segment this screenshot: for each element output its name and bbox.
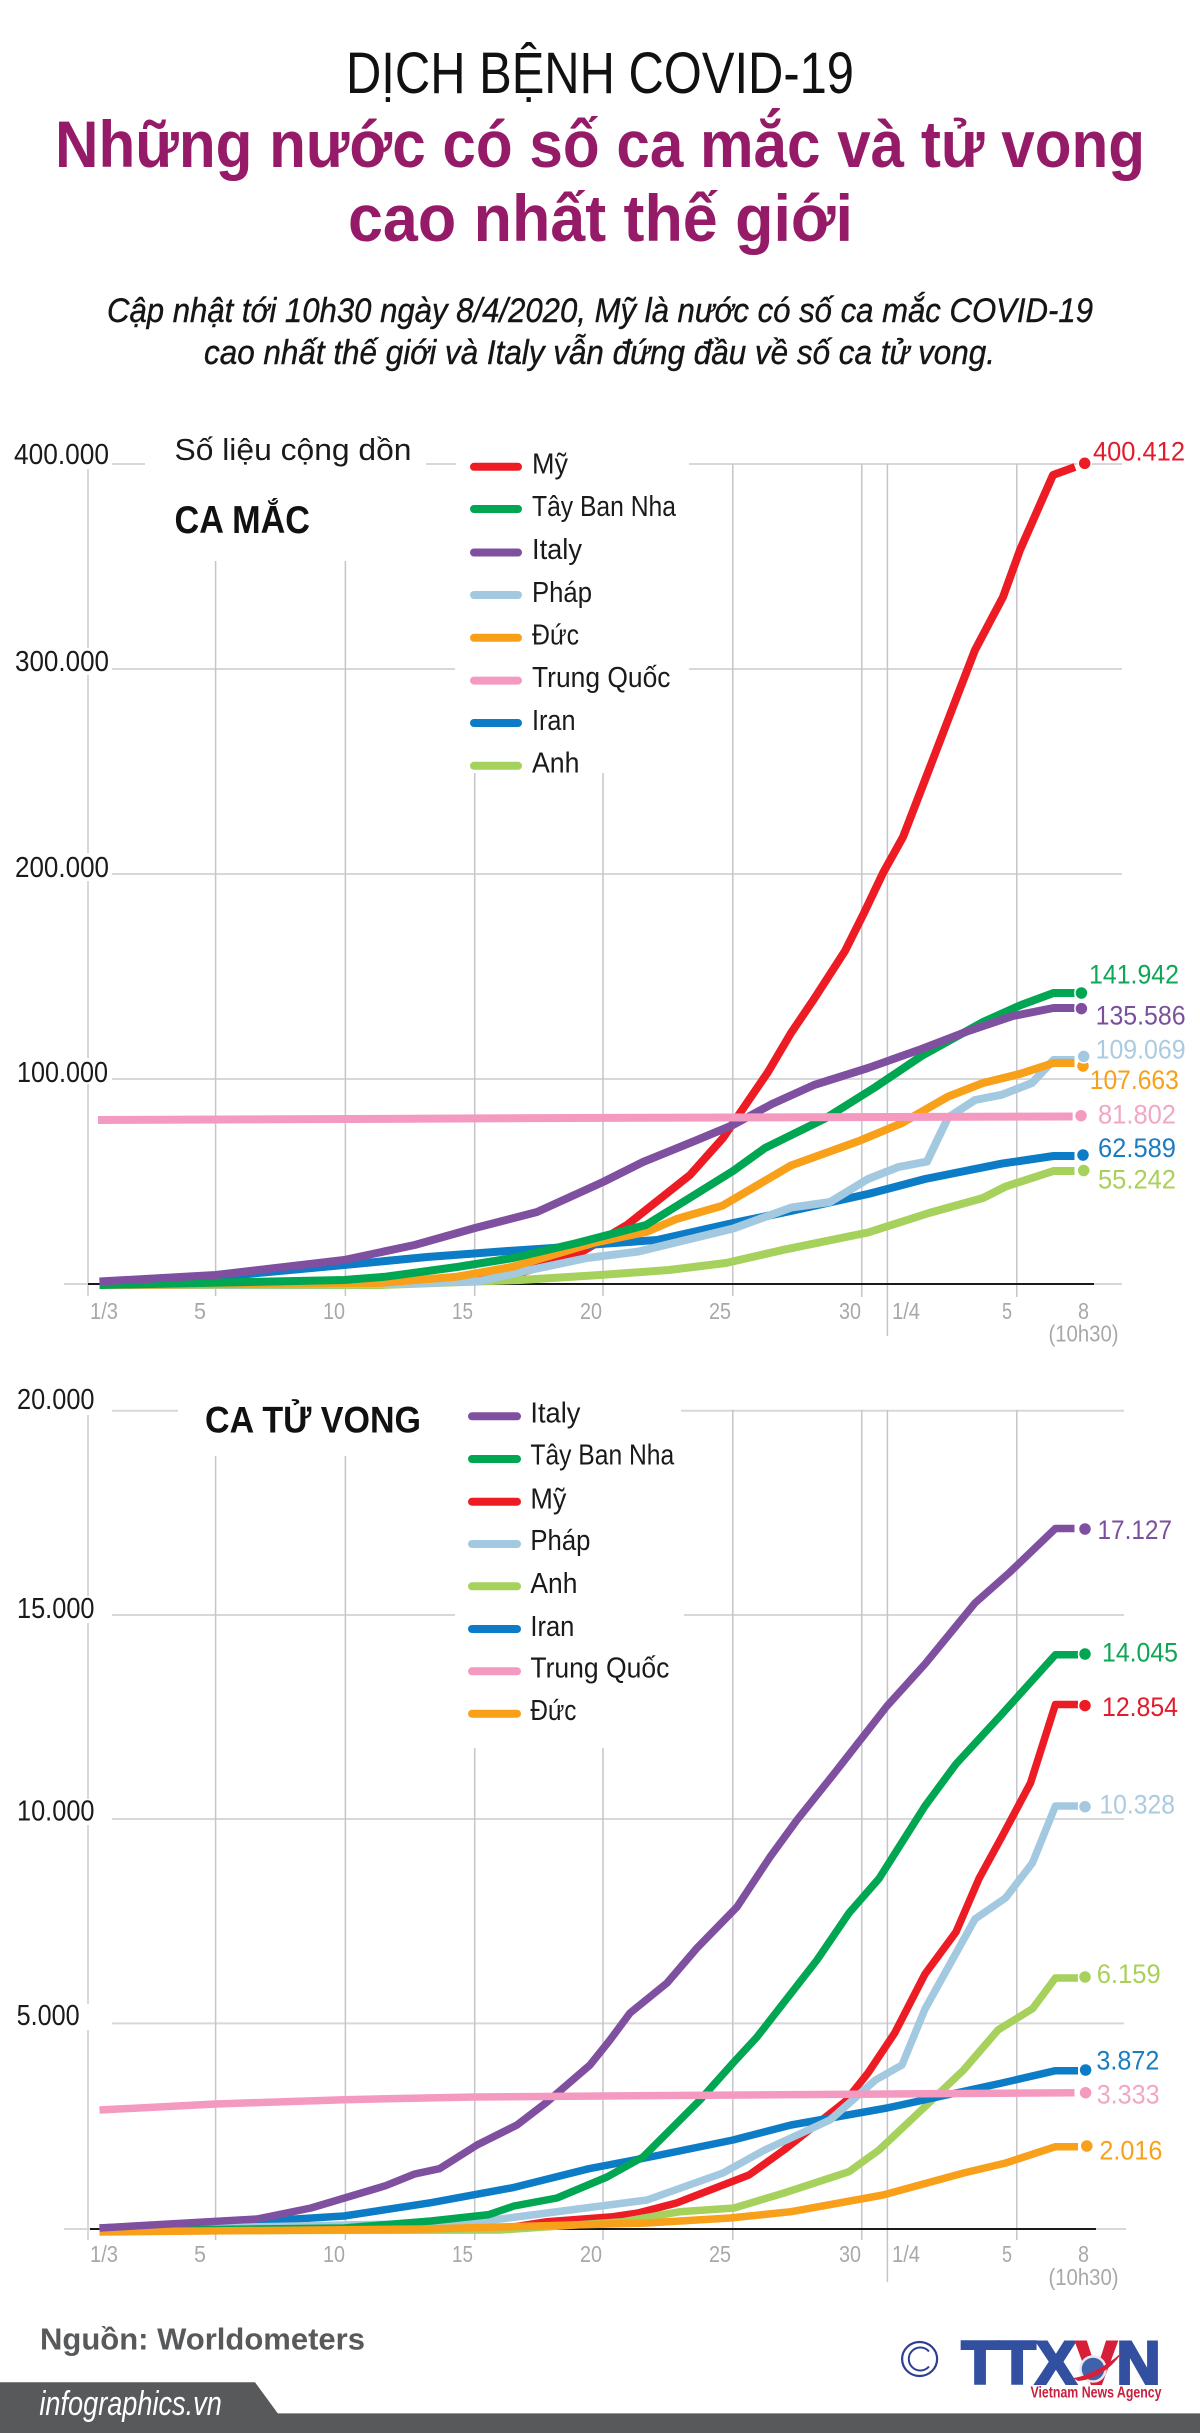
value labels: cases: 109.069	[1096, 1034, 1186, 1064]
value labels: cases	[1089, 437, 1186, 1194]
series: China cases	[98, 1116, 1073, 1120]
series: Iran deaths	[100, 2071, 1078, 2228]
legend: deaths: Iran	[530, 1611, 574, 1643]
y axis labels: 15.000	[17, 1593, 94, 1625]
legend: cases: Iran	[532, 705, 576, 737]
header: titles and intro	[55, 41, 1145, 372]
legend: deaths: Đức	[530, 1695, 576, 1727]
line series: deaths	[100, 1528, 1078, 2232]
icon: globe	[1073, 2352, 1122, 2382]
series: Germany deaths	[100, 2147, 1078, 2232]
line series: cases	[98, 467, 1075, 1285]
series: USA cases	[100, 467, 1075, 1284]
value labels: deaths: 12.854	[1102, 1692, 1178, 1722]
wordmark: TTXVN	[962, 2330, 1160, 2396]
x axis labels	[90, 2241, 1118, 2290]
legend: deaths	[472, 1398, 675, 1727]
source note: Nguồn: Worldometers	[40, 2322, 365, 2357]
chart heading: deaths: CA TỬ VONG	[205, 1399, 421, 1441]
legend: cases: Trung Quốc	[532, 662, 670, 694]
legend: cases: Mỹ	[532, 448, 568, 480]
value labels: cases: 55.242	[1098, 1164, 1176, 1194]
y axis labels: 300.000	[15, 646, 109, 678]
x axis labels: 30	[839, 1298, 861, 1324]
value labels: deaths: 10.328	[1099, 1790, 1175, 1820]
intro line 2: cao nhất thế giới và Italy vẫn đứng đầu về số ca tử vong.	[204, 334, 995, 372]
x axis labels: (10h30)	[1048, 1320, 1118, 1346]
x axis labels: 20	[580, 2241, 602, 2267]
value labels: deaths: 6.159	[1097, 1959, 1161, 1989]
x axis labels: 5	[194, 1298, 206, 1324]
series: China deaths	[100, 2093, 1074, 2110]
panel: deaths chart	[10, 1384, 1178, 2290]
series: Spain deaths	[100, 1655, 1078, 2231]
legend: cases: Pháp	[532, 577, 592, 609]
end markers: deaths	[1078, 1522, 1093, 2152]
value labels: deaths: 3.333	[1097, 2079, 1160, 2109]
y axis labels: 5.000	[17, 2000, 80, 2032]
legend: deaths: Trung Quốc	[530, 1653, 669, 1685]
series: UK deaths	[100, 1978, 1078, 2231]
y axis labels: 100.000	[17, 1057, 108, 1089]
value labels: cases: 81.802	[1098, 1099, 1176, 1129]
legend: deaths: Tây Ban Nha	[530, 1439, 675, 1471]
x axis labels: 1/3	[90, 2241, 118, 2267]
x axis labels: 5	[1002, 2241, 1012, 2267]
note: cumulative data: Số liệu cộng dồn	[174, 432, 412, 467]
x axis labels: 15	[452, 1298, 473, 1324]
main title line 2: cao nhất thế giới	[348, 181, 853, 255]
x axis labels: 1/4	[892, 2241, 920, 2267]
kicker title: DỊCH BỆNH COVID-19	[346, 41, 854, 106]
value labels: cases: 107.663	[1090, 1065, 1179, 1095]
chart heading: cases: CA MẮC	[174, 498, 310, 542]
value labels: deaths: 2.016	[1099, 2135, 1162, 2165]
y axis labels: 10.000	[17, 1796, 94, 1828]
legend: cases	[474, 448, 677, 780]
x axis labels: 25	[709, 2241, 731, 2267]
x axis labels: 10	[323, 1298, 345, 1324]
series: Italy deaths	[100, 1528, 1074, 2228]
value labels: deaths: 14.045	[1102, 1638, 1178, 1668]
x axis labels: 1/4	[892, 1298, 920, 1324]
x axis labels: 1/3	[90, 1298, 118, 1324]
x axis labels: 8	[1078, 1298, 1089, 1324]
panel: cases chart	[10, 432, 1186, 1346]
series: Spain cases	[100, 993, 1074, 1285]
intro line 1: Cập nhật tới 10h30 ngày 8/4/2020, Mỹ là nước có số ca mắc COVID-19	[107, 292, 1093, 330]
value labels: deaths: 3.872	[1096, 2045, 1159, 2075]
x axis labels	[90, 1298, 1118, 1346]
y axis labels: 400.000	[14, 439, 109, 471]
x axis labels: 8	[1078, 2241, 1089, 2267]
y axis labels: 200.000	[15, 852, 109, 884]
series: USA deaths	[100, 1704, 1078, 2230]
legend: cases: Anh	[532, 748, 580, 780]
series: France deaths	[100, 1806, 1078, 2230]
value labels: deaths: 17.127	[1098, 1515, 1172, 1545]
x axis labels: 15	[452, 2241, 473, 2267]
legend: deaths: Italy	[530, 1398, 581, 1430]
value labels: deaths	[1096, 1515, 1178, 2165]
x axis labels: 5	[194, 2241, 206, 2267]
footer site name: infographics.vn	[39, 2385, 222, 2423]
value labels: cases: 141.942	[1089, 960, 1179, 990]
footer bar	[0, 2382, 1200, 2433]
agency name: Vietnam News Agency	[1030, 2384, 1162, 2401]
legend: deaths: Anh	[530, 1568, 577, 1600]
y axis labels	[10, 439, 110, 1089]
legend: deaths: Pháp	[530, 1525, 590, 1557]
series: Italy cases	[100, 1008, 1074, 1282]
value labels: cases: 135.586	[1096, 1001, 1186, 1031]
x axis labels: 20	[580, 1298, 602, 1324]
logo: TTXVN	[902, 2330, 1162, 2401]
value labels: cases: 400.412	[1093, 437, 1185, 467]
y axis labels: 20.000	[17, 1384, 94, 1416]
series: France cases	[100, 1060, 1074, 1285]
legend: cases: Italy	[532, 534, 582, 566]
value labels: cases: 62.589	[1098, 1133, 1176, 1163]
series: UK cases	[100, 1171, 1074, 1285]
legend: cases: Tây Ban Nha	[532, 491, 677, 523]
x axis labels: (10h30)	[1048, 2264, 1118, 2290]
x axis labels: 10	[323, 2241, 345, 2267]
y axis labels	[10, 1384, 100, 2032]
icon: copyright	[902, 2342, 937, 2376]
x axis labels: 25	[709, 1298, 731, 1324]
x axis labels: 5	[1002, 1298, 1012, 1324]
legend: cases: Đức	[532, 620, 579, 652]
series: Germany cases	[100, 1063, 1074, 1285]
series: Iran cases	[100, 1156, 1074, 1282]
end markers: cases	[1074, 457, 1091, 1177]
x axis labels: 30	[839, 2241, 861, 2267]
legend: deaths: Mỹ	[530, 1483, 567, 1515]
